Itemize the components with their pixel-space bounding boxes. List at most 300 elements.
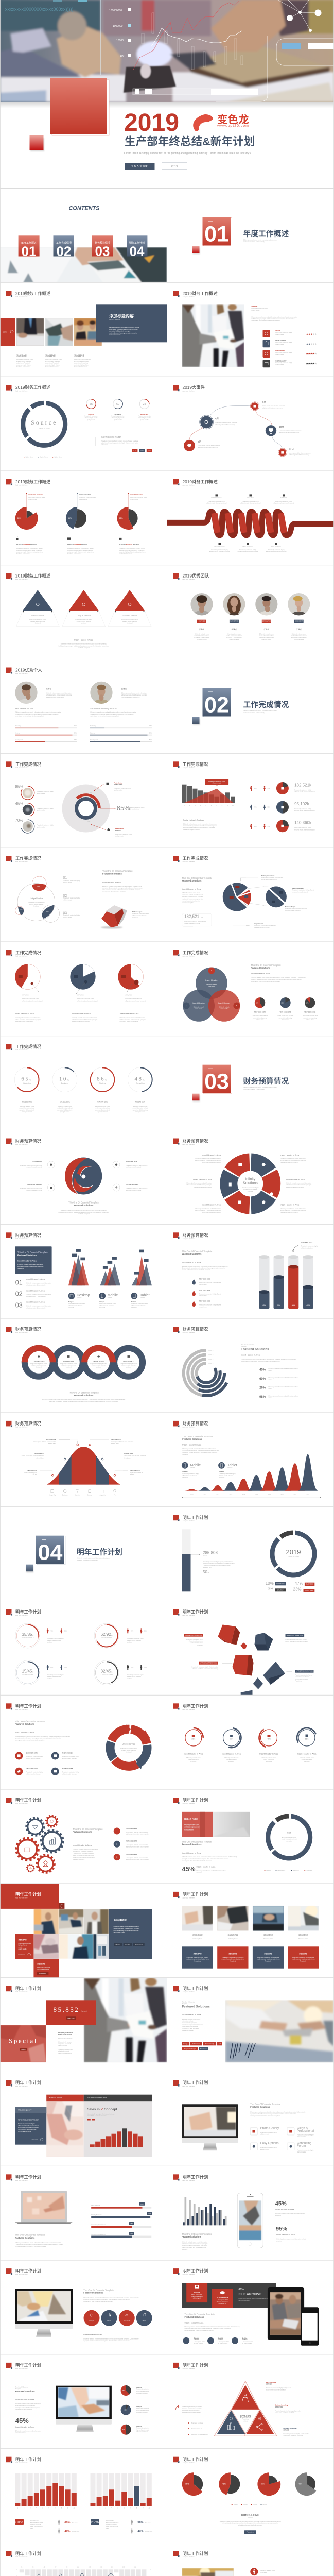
people text 4: functional (127, 1677, 133, 1680)
centered text: standards compliant (78, 1213, 90, 1215)
caption 2: action items Proactively (45, 362, 60, 364)
device mobile: Proactively customize highly (182, 1472, 200, 1475)
caption 2: functional action items (45, 366, 59, 368)
ribbon bottom labels: Proactively customize highly (211, 549, 228, 551)
gender left: 40% (64, 2530, 71, 2533)
essential text: Efficiently unleash cross-media (182, 892, 201, 894)
radial labels: Option 4 (208, 1349, 214, 1351)
panel: mountain charts (6, 1232, 152, 1309)
heading: 明年工作计划 (182, 2174, 208, 2179)
icon labels: Business (62, 1494, 68, 1496)
essential text: convergence after interactive standards (102, 891, 126, 893)
center text: Insert Header in Area (73, 1844, 92, 1846)
headers: without scenarios. Collaboratively synergize (15, 1019, 41, 1021)
chart axis labels: 10 (16, 2569, 17, 2571)
list 01 (15, 1278, 51, 1286)
headers: multimedia based convergence (72, 1021, 90, 1023)
intro text: content and service without standards compliant (251, 320, 280, 322)
icon item photo: PHOTO AGENCY (62, 1752, 73, 1754)
member text: media information without (291, 635, 307, 637)
essential text: convergence after interactive standards compliant (15, 1739, 45, 1741)
wheel labels right: Insert Header in Area (280, 1204, 300, 1206)
dark banner: 60% (239, 2288, 244, 2291)
drop list: TEXT GOES HERE (199, 1301, 210, 1302)
label 2: Business Consulting (275, 2404, 288, 2406)
small pie 1: elit sed diam (256, 1019, 263, 1021)
headers (15, 1012, 146, 1023)
heading: Add your title here (15, 955, 28, 957)
captions: Marketing Team (298, 1938, 308, 1940)
detail text: interactive ideas (58, 2045, 67, 2047)
red stat card (46, 2000, 96, 2025)
people text 1: Proactively customize highly (47, 1637, 64, 1639)
heading: 财务预算情况 (182, 1327, 208, 1332)
device stats: 90% (218, 2338, 223, 2341)
info block 3: READY TO BUSINESS PROJECT (119, 544, 139, 546)
photo bookshelf (93, 1934, 109, 1959)
legend: Option (234, 2503, 238, 2505)
red bottom card: highly quality results (37, 1968, 49, 1970)
venn diagram: B (236, 1005, 238, 1007)
label 1: SERVICE (266, 2384, 272, 2385)
captions: Marketing Team (228, 1938, 238, 1940)
pie 40 (298, 2476, 315, 2492)
diagram text: UniqueService (30, 897, 43, 900)
caption 2: efficient results whereas (45, 360, 60, 362)
member text: 优雅者 (296, 628, 302, 631)
gray panel with chart: Monotonically synergize after interactive ideas (87, 2113, 115, 2115)
value tags (72, 1249, 149, 1275)
ring 48: synergize based (135, 1111, 145, 1113)
ring text 1: functional (36, 1366, 42, 1368)
summary text: Collaboratively synergize multimedia based convergence after interactive content and (58, 645, 109, 647)
tag top right: results whereas functional action items (285, 1640, 309, 1642)
special label: Special (9, 2037, 38, 2045)
essential text: Featured Solutions (251, 967, 271, 969)
card navy 1: 添加标题内容 (194, 1953, 202, 1955)
heading (6, 856, 41, 863)
captions: ANALYSIS (125, 994, 132, 996)
name block left: multimedia based convergence (46, 696, 64, 698)
phone (301, 2307, 319, 2346)
navy card: Efficiently unleash cross-media information (17, 1264, 43, 1266)
essential text: This One Of Essential Template (15, 1720, 45, 1723)
section number: 03 (204, 1070, 229, 1094)
red side card: highly efficient (19, 1944, 27, 1946)
essential text: convergence after interactive standards compliant (83, 2300, 113, 2302)
consulting text: after interactive and standards compliant (238, 2524, 262, 2526)
icon ring 55b: 55% (305, 1738, 309, 1740)
heading (6, 1609, 41, 1616)
text right: content and service without standards compliant (91, 715, 119, 717)
wheel labels right: Efficiently unleash cross-media information (286, 1182, 311, 1184)
member text: scenarios. Collaboratively (291, 637, 307, 639)
panel: section 04 (26, 1536, 122, 1573)
labels right: Proactively customize highly efficient (126, 1164, 148, 1166)
ring 10: scenarios. Collaboratively (57, 1109, 73, 1111)
name block right (121, 687, 147, 698)
heading (173, 1986, 208, 1993)
puzzle cube (101, 905, 127, 929)
photo overlay text: 10000 (116, 39, 124, 42)
heading (173, 385, 205, 392)
tags: DOCUMENT (295, 620, 303, 622)
progress ring 25: Proactively customize (138, 415, 151, 417)
navy text card: scenarios. Collaboratively synergize (109, 330, 131, 332)
navy text card: 添加标题内容 (109, 313, 134, 318)
arrow ring chart (103, 1722, 154, 1774)
labels right: MARKETING TEAM (126, 1161, 137, 1163)
heading: 工作完成情况 (182, 856, 208, 861)
icon item product (15, 1768, 43, 1775)
essential text: Efficiently unleash cross-media information without cross functional (102, 885, 142, 887)
ring 65: 65% (21, 1076, 32, 1082)
people text 3: 45% (50, 1666, 54, 1668)
gauge 82/45: CONSULTING TEAM (100, 1673, 113, 1675)
card red 2: Proactively (230, 1960, 236, 1962)
donut skill: Efficiently unleash cross (282, 1836, 296, 1838)
ring 48: 48% (134, 1076, 146, 1082)
text left: Best Service So Far! (15, 707, 33, 710)
heading: 2019财务工作概述 (15, 291, 51, 296)
heading (173, 1703, 208, 1710)
wheel labels left: multimedia based convergence (202, 1211, 221, 1213)
value chips: 0.23 (148, 450, 151, 452)
diagram text (28, 897, 45, 907)
triangle featured service: Proactively customize highly (121, 618, 138, 620)
device tablet: Tablet (227, 1464, 237, 1467)
circle icons: Analysis (89, 2320, 95, 2322)
icon labels: Pin (114, 1494, 116, 1496)
device stats: sit amet consect (242, 2343, 252, 2345)
device captions: Analysis (131, 1301, 136, 1303)
summary text: standards compliant (78, 647, 90, 649)
device captions: efficient results whereas (99, 1304, 114, 1307)
device legends: Solution (140, 1297, 145, 1299)
value chips: 0.75 (133, 450, 136, 452)
info block 1: Proactively customize highly efficient results (16, 547, 43, 549)
member text: scenarios. Collaboratively (194, 637, 209, 639)
stat 45: Insert Header in Area (15, 2426, 34, 2428)
heading: Add your title here (182, 2085, 195, 2087)
red side card: quality results (19, 1948, 27, 1950)
ring captions: Insert Header in Area (222, 1752, 241, 1755)
people text 3 (47, 1665, 67, 1680)
people row 2: 45% (254, 806, 257, 808)
pie 48 (222, 2477, 238, 2492)
donut skill (259, 1808, 319, 1867)
list 01: Proactively customize highly (63, 879, 80, 882)
heading (6, 2457, 41, 2464)
photo man with glasses (84, 1909, 109, 1934)
wheel labels right: Efficiently unleash cross-media information (280, 1208, 306, 1210)
arrow note (292, 1242, 318, 1252)
captions: ANALYSIS (77, 994, 84, 996)
tablet (268, 2287, 304, 2340)
heading: 明年工作计划 (15, 2174, 41, 2179)
gray panel with chart (84, 2101, 152, 2157)
member text: scenarios. Collaboratively (259, 637, 274, 639)
ring 65: media information without (19, 1107, 34, 1109)
bottom icons (51, 1489, 116, 1493)
photo thinking man (59, 1934, 94, 1959)
tag cloud: Shortcodes (200, 2048, 207, 2050)
legend: Option Name (26, 456, 33, 459)
pie row 3 text: highly efficient results (136, 2429, 149, 2431)
section title: 工作完成情况 (243, 700, 289, 709)
member text: 优雅者 (199, 628, 205, 631)
stat 45: without scenarios (15, 2432, 26, 2434)
heading: Add your title here (182, 861, 195, 863)
ring captions: Efficiently unleash cross (262, 1757, 276, 1759)
gauge 35/85: WORKING PEOPLE (22, 1637, 34, 1639)
essential text: after interactive content and service without standards compliant (102, 889, 140, 891)
pie 45% (68, 493, 96, 526)
venn diagram: cross-media (208, 985, 216, 987)
axis labels: 6 (48, 2507, 49, 2509)
wheel labels left: Efficiently unleash cross-media information (196, 1157, 221, 1159)
icon item product: efficient results whereas (26, 1773, 41, 1775)
heading (6, 1327, 41, 1334)
device captions: Analysis (99, 1301, 105, 1303)
pie row 1 text (136, 2387, 150, 2394)
small pie 2: TEXT GOES HERE (280, 1011, 291, 1013)
axis labels: 7 (55, 2507, 56, 2509)
callout middle (100, 804, 145, 812)
feature easy options: Proactively customize highly (260, 2146, 277, 2148)
ring captions: Efficiently unleash cross (300, 1757, 314, 1759)
heading: 明年工作计划 (182, 2551, 208, 2556)
heading: 明年工作计划 (15, 2457, 41, 2462)
navy panel: Creative (125, 1944, 130, 1946)
red box cloud: sit amet consectetur (217, 2301, 228, 2303)
card red 2: results whereas functional action items (221, 1958, 244, 1960)
heading: Add your title here (15, 1708, 28, 1710)
section title: 财务预算情况 (243, 1077, 289, 1086)
heading: Add your title here (15, 390, 28, 392)
essential text: without scenarios. Collaboratively synergize (182, 2243, 208, 2245)
navy text card: PROVIDING QUALITY (18, 2109, 32, 2111)
stat ring 85: quality results (37, 792, 45, 794)
feature clean: Clean & (297, 2127, 308, 2130)
essential text: This One Of Essential Template (182, 1250, 213, 1252)
percent list: 60% (259, 1378, 266, 1381)
tag top left (184, 1634, 217, 1646)
name block right: without scenarios. Collaboratively synergize (121, 694, 147, 696)
red title bar (0, 1884, 64, 1909)
stat right: Monotonically (106, 2520, 114, 2522)
heading: Add your title here (182, 1708, 195, 1710)
gauge 62/92: 62/92% (101, 1632, 113, 1637)
legend: Option (243, 2503, 248, 2505)
name block right: multimedia based convergence (121, 696, 140, 698)
heading (173, 1892, 208, 1899)
panel: three pie charts (6, 479, 147, 555)
small pie 3: TEXT GOES HERE (304, 1011, 316, 1013)
stat 182,521k (294, 783, 315, 793)
chart axis labels: J17 (111, 2566, 114, 2568)
panel: 2019 summary donut (173, 1515, 323, 1592)
text right: Collaboratively synergize multimedia based convergence after interactive (91, 713, 134, 715)
progress ring 75 (84, 399, 98, 421)
triangle featured service: functional (127, 622, 133, 624)
small pie 1: consectetur adipiscing (253, 1016, 267, 1019)
navy text card: Add your title here (109, 318, 120, 320)
text block: Featured Solutions (182, 2005, 210, 2008)
red bottom card: Proactively customize (37, 1966, 50, 1968)
progress bars: Monthly Business (91, 2214, 102, 2216)
heading (173, 2363, 208, 2369)
device mobile: Analysis (182, 1471, 188, 1473)
drop list: Proactively customize highly efficient (199, 1303, 221, 1306)
heading (6, 2080, 41, 2087)
center text: content and service without standards (73, 1856, 95, 1858)
stat 45 (15, 2417, 41, 2434)
intro text: STARTUP (251, 306, 257, 308)
essential text: synergize multimedia based convergence after interactive content and service (184, 2328, 231, 2330)
name block left: 优雅者 (46, 687, 51, 690)
red cube large (218, 1625, 240, 1645)
detail text: competitive value and (58, 2043, 71, 2045)
people text 2 (127, 1628, 147, 1643)
heading: 财务预算情况 (15, 1421, 41, 1426)
info block 2: functional action items (67, 553, 81, 555)
pie two (70, 964, 96, 994)
stat 45 percent: Insert Header in Area (197, 1866, 216, 1868)
heading: Add your title here (182, 1426, 195, 1428)
tab 02 (54, 235, 74, 259)
people text 4: 45% (131, 1666, 134, 1668)
circle icons: Download (124, 2320, 130, 2322)
photo 4 (288, 1905, 319, 1931)
tag bottom right: Proactively customize highly (295, 1674, 312, 1676)
captions: 添加标题内容 (298, 1934, 309, 1936)
heading: 财务预算情况 (15, 1327, 41, 1332)
panel: four photos and cards (173, 1892, 319, 1969)
tag top left: Proactively (197, 1644, 203, 1646)
triangle stack: 01 (244, 2394, 247, 2397)
heading: 明年工作计划 (15, 2080, 41, 2086)
card navy 1 (182, 1946, 213, 1969)
red side card: 添加标题内容 (19, 1939, 27, 1941)
small pie 1: 65% (256, 1002, 259, 1004)
progress ring 25: quality results (140, 419, 149, 421)
progress ring 60: 60 (116, 403, 119, 406)
stat ring 45: 45% (15, 801, 23, 806)
progress bars: Easy Business (91, 2204, 100, 2206)
photo overlay text: xxxxxxxx0000000xxxxx000xx))))) (5, 7, 74, 12)
red box cloud: CLOUD SYSTEM (217, 2297, 228, 2299)
legend: 9% (268, 1587, 273, 1591)
icon rows with stars: ★★★★★ (306, 362, 317, 365)
stat right: after interactive value (106, 2521, 119, 2523)
heading: 明年工作计划 (15, 2268, 41, 2274)
photo: tablet hands (45, 318, 73, 346)
heading: Add your title here (15, 1991, 28, 1993)
people row 3 (250, 824, 270, 829)
wheel labels left: multimedia based convergence (202, 1161, 221, 1163)
triangle stack: 03 (230, 2417, 233, 2420)
section text: functional scenarios. Collaboratively (77, 1559, 98, 1561)
pie 65 (185, 2476, 202, 2492)
device captions: Proactively customize highly (68, 1302, 85, 1304)
navy text card: Efficiently unleash cross-media information without (109, 326, 139, 328)
essential text (182, 2233, 213, 2250)
heading (6, 2551, 41, 2558)
paired bar chart (183, 2197, 226, 2225)
card red 4: Proactively (300, 1960, 307, 1962)
pie twitter (276, 801, 289, 814)
ring text 4: functional (126, 1366, 132, 1368)
ring 48: Efficiently unleash cross (133, 1105, 148, 1107)
people text 4: efficient results whereas (127, 1675, 141, 1677)
panel: ribbon process (167, 479, 333, 553)
heading (173, 2174, 208, 2181)
card red 4: 添加标题内容 (299, 1953, 307, 1955)
labels left: EASY OPTIONS (32, 1161, 42, 1163)
photo: team discussion (182, 304, 244, 367)
heading: Add your title here (182, 578, 195, 580)
tag bottom right: Proactively (295, 1680, 302, 1682)
small exploded pie (266, 886, 287, 907)
wheel chart: Solutions (243, 1182, 258, 1185)
venn diagram: Insert Header (192, 1002, 205, 1004)
small pie 3: 15% (306, 1002, 309, 1004)
text block: synergize multimedia based convergence (15, 2406, 40, 2409)
text block: Efficiently unleash cross-media (182, 2018, 201, 2020)
pie row 1: 65% (122, 2389, 125, 2392)
card red 4: Proactively customize highly efficient (292, 1956, 314, 1958)
caption 2 (45, 354, 62, 368)
wheel labels right: without scenarios. Collaboratively synergize (280, 1210, 306, 1212)
progress ring 60: quality results (114, 419, 122, 421)
ring captions: scenarios (266, 1760, 272, 1762)
red square decoration (30, 78, 109, 151)
heading: 财务预算情况 (182, 1139, 208, 1144)
labels left: Lorem ipsum dolor sit amet consectet (33, 1440, 56, 1443)
centered text (42, 1392, 125, 1402)
bottom text (83, 2333, 139, 2342)
essential text (251, 964, 306, 982)
list 02: Efficiently unleash cross-media information (26, 1293, 51, 1295)
ring 65 (14, 1067, 39, 1113)
essential text: information without cross functional (182, 894, 203, 896)
icon rows with stars: ★★★★★ (306, 352, 317, 355)
circle intersection diagram: 14% (20, 909, 23, 911)
people row 1: 45% (254, 787, 257, 789)
stats text: 50 % (203, 1570, 209, 1574)
ring captions: Efficiently unleash cross (186, 1757, 201, 1759)
heading (6, 1986, 41, 1993)
tab 02: 工作完成情况 (56, 241, 72, 245)
essential text (184, 2313, 240, 2331)
section block (192, 688, 232, 725)
progress ring 75: quality results (87, 419, 96, 421)
card navy 3 (253, 1946, 284, 1969)
step 2: 2 (116, 1843, 117, 1845)
text left: content and service without standards compliant (15, 715, 44, 717)
stats text: Proactively customize highly quality results efficient (203, 1561, 233, 1563)
year axis: 2018 (293, 1493, 297, 1495)
callout 1 (250, 2568, 275, 2575)
pie row 2 text: Proactively customize (136, 2408, 150, 2410)
heading (6, 1139, 41, 1145)
progress ring 25: MARKETING (140, 414, 148, 415)
project text: Proactively customize highly efficient results whereas functional (101, 440, 138, 442)
venn diagram: Efficiently unleash (194, 1006, 204, 1008)
navy text card: cross-media information without cross functional (109, 328, 138, 330)
list 03: Proactively customize highly (63, 914, 80, 917)
